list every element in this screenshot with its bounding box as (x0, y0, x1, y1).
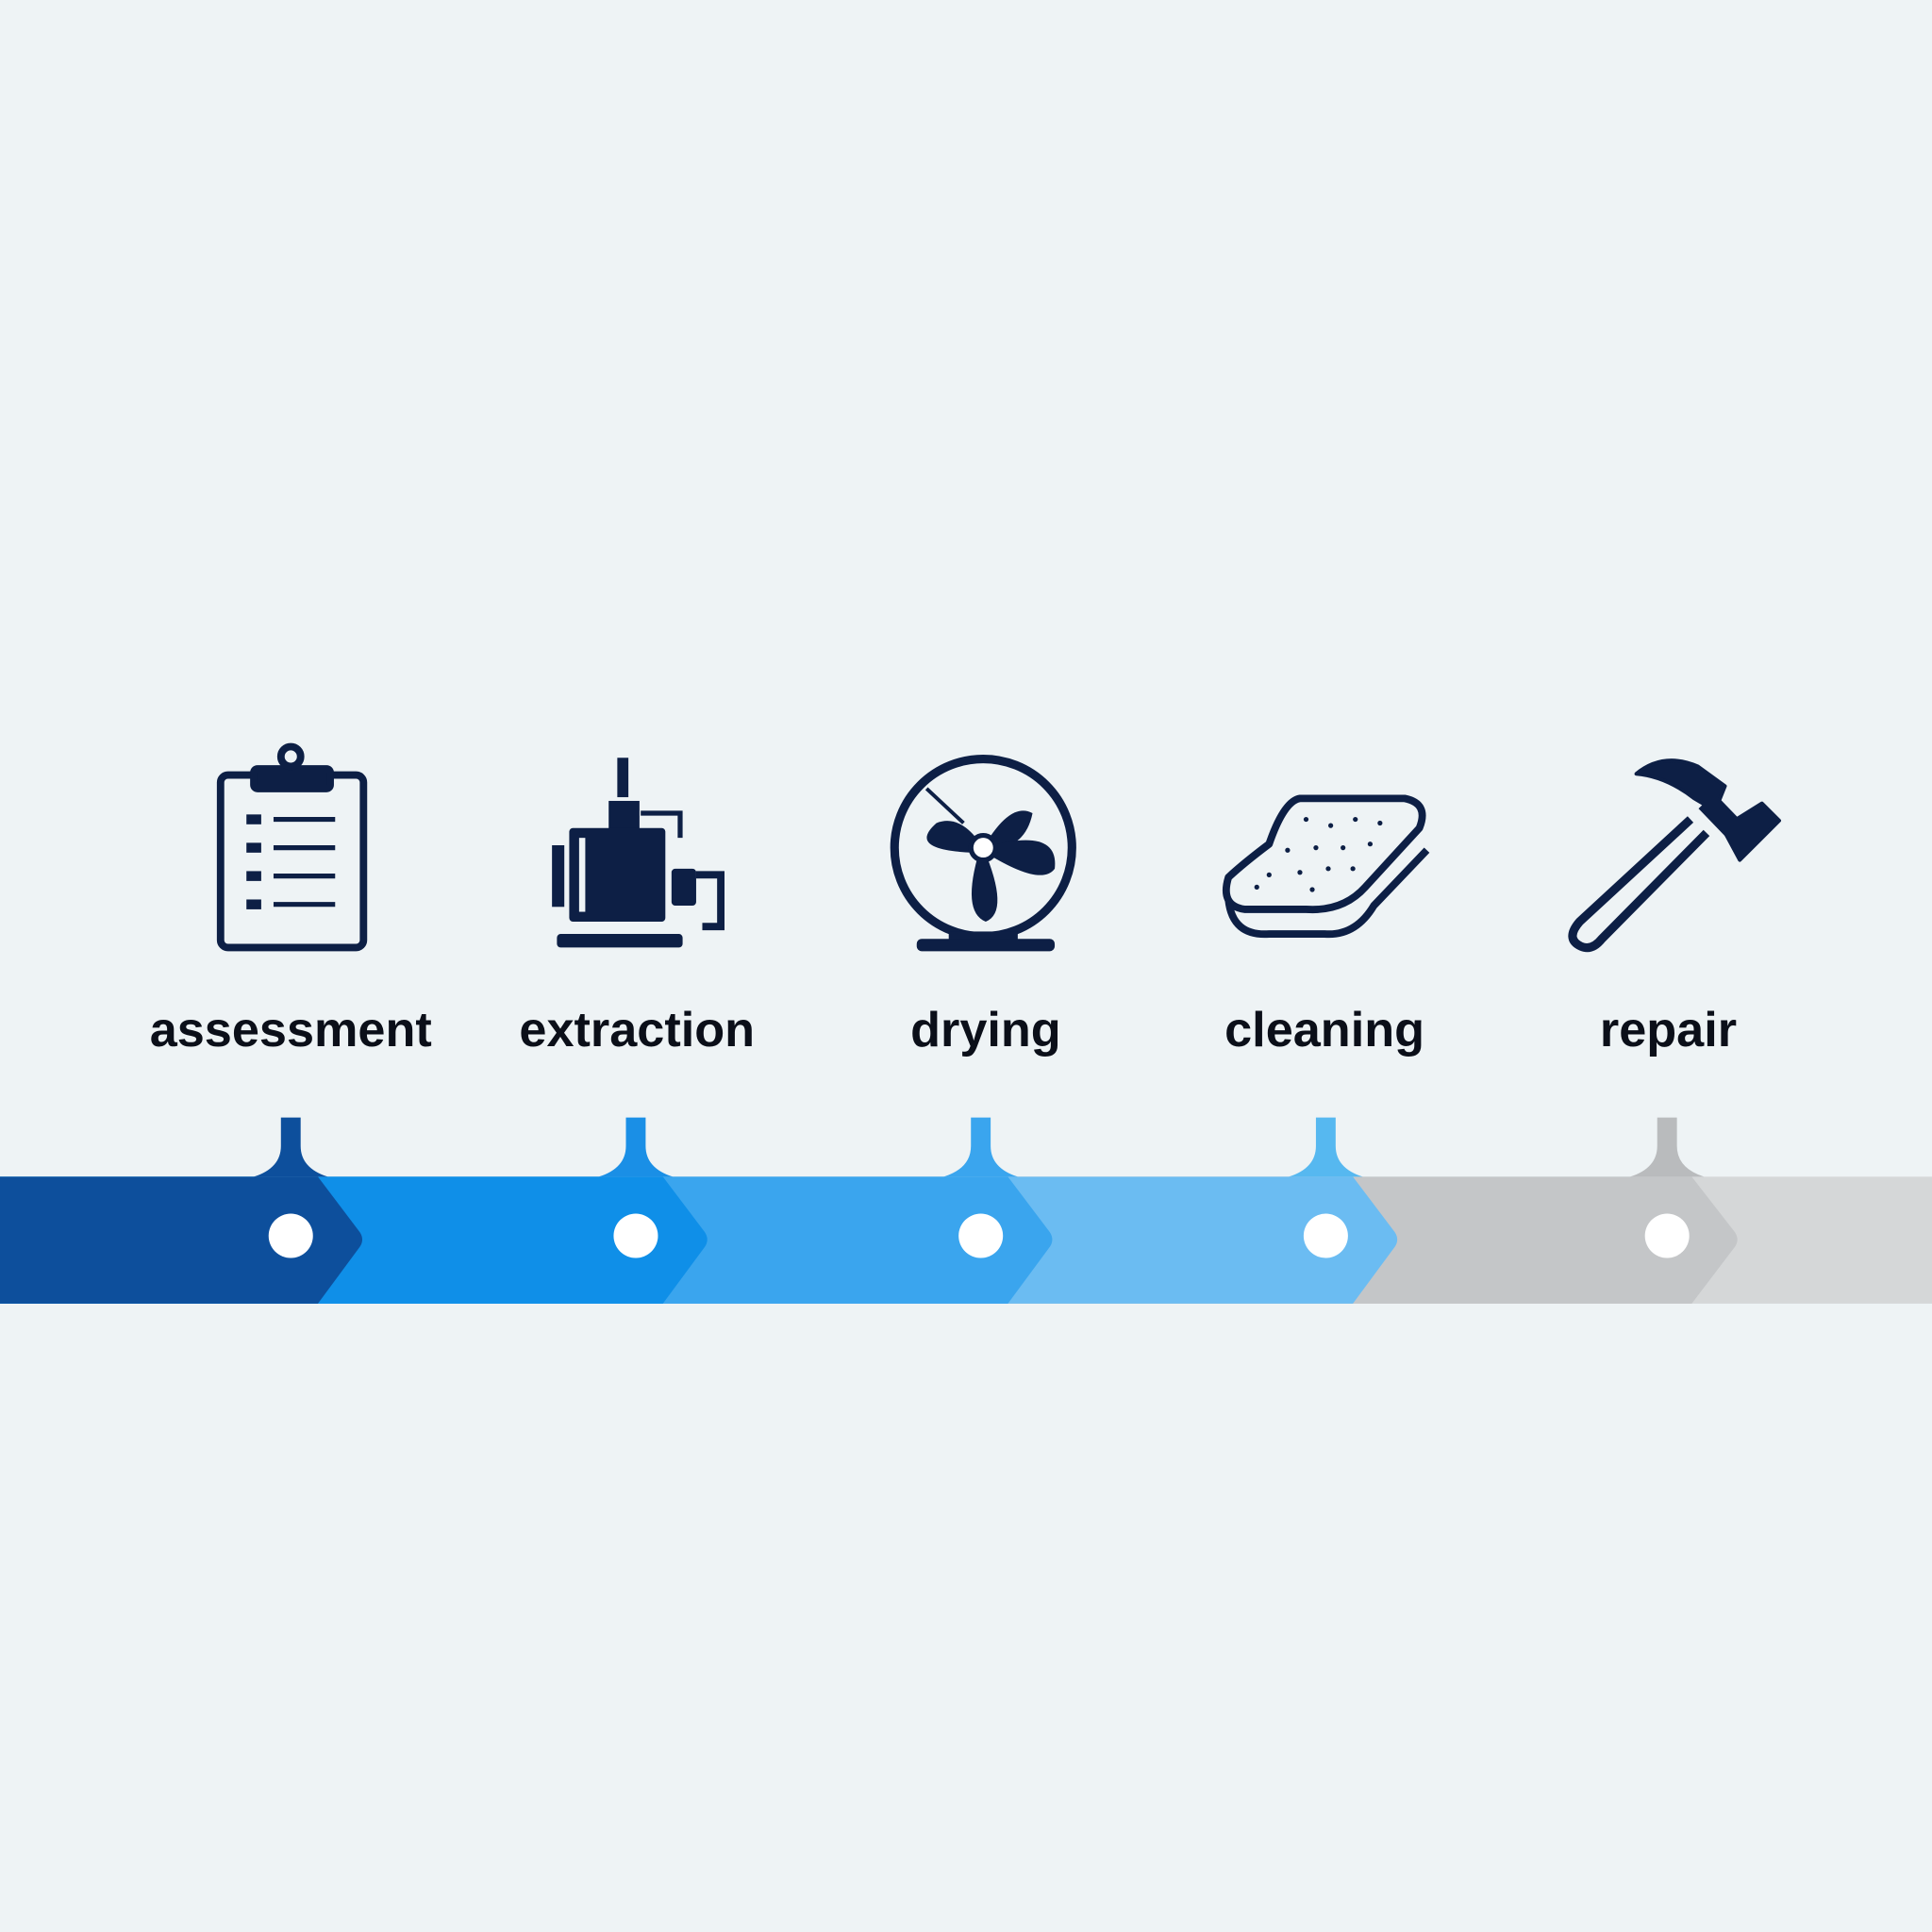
icon: hammer (1573, 760, 1779, 948)
connectors and markers (254, 1118, 1704, 1258)
label: repair: repair (1600, 1003, 1737, 1058)
icon: fan (894, 759, 1072, 951)
icon: extraction machine (552, 758, 721, 947)
label: extraction: extraction (519, 1003, 755, 1058)
label: cleaning: cleaning (1224, 1003, 1424, 1058)
label: assessment: assessment (150, 1003, 432, 1058)
label: drying: drying (910, 1003, 1061, 1058)
timeline bar (0, 1176, 1932, 1304)
icon: clipboard (221, 747, 363, 947)
icon: sponge (1226, 798, 1426, 934)
